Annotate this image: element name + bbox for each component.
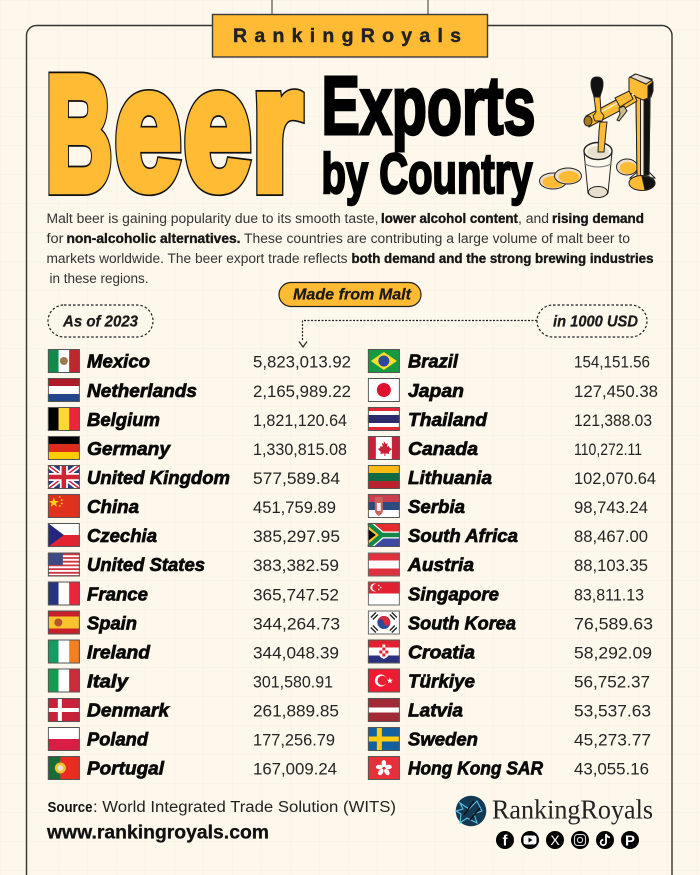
row: Japan: 127,450.38 [574,382,658,401]
row: South Korea [368,610,653,634]
banner: RankingRoyals [212,14,488,57]
row: Lithuania [368,465,656,489]
row: Mexico: 5,823,013.92 [253,353,351,372]
text block: intro paragraph: both demand and the strong brewing industries [352,251,654,266]
row: Denmark: Denmark [87,700,171,720]
row: Croatia [368,640,652,664]
row: Netherlands: 2,165,989.22 [253,382,351,401]
row: Latvia [368,698,651,722]
row: Portugal [48,756,337,780]
text block: intro paragraph: These countries are contributing a large volume of malt beer to [244,231,630,246]
pill: Made from Malt [279,282,421,306]
row: Lithuania: 102,070.64 [574,469,656,488]
row: China: China [87,496,139,517]
title: Beer: B [46,44,112,224]
row: Canada [368,436,642,460]
row: Germany: 1,330,815.08 [253,440,347,459]
row: United States: United States [87,554,205,575]
row: South Africa: 88,467.00 [574,527,648,546]
logo: RankingRoyals: RankingRoyals [492,794,653,824]
title: by Country: by Country [322,142,533,206]
icon: tiktok [596,831,614,849]
website: www.rankingroyals.com [46,822,269,844]
text block: intro paragraph: lower alcohol content [381,211,519,226]
row: Brazil: Brazil [408,351,459,372]
row: Serbia: Serbia [408,496,465,517]
row: Denmark [48,698,339,722]
row: United States: 383,382.59 [253,556,339,575]
right column: countries 16-30 [368,349,658,780]
row: Latvia: Latvia [408,700,463,720]
row: Portugal: 167,009.24 [253,760,337,779]
row: Austria: 88,103.35 [574,556,648,575]
icon: pinterest: P [625,832,635,850]
title: Beer: e [184,33,251,225]
row: France: 365,747.52 [253,585,339,604]
row: Austria: Austria [407,554,474,575]
left column: countries 1-15 [48,349,351,780]
row: Denmark: 261,889.85 [253,702,339,720]
row: United Kingdom [48,465,340,489]
row: Netherlands: Netherlands [87,380,197,401]
row: United Kingdom: United Kingdom [87,467,230,488]
row: Serbia: 98,743.24 [574,498,648,517]
row: Belgium [48,407,347,431]
row: Canada: 110,272.11 [574,440,642,459]
icon: pinterest [621,831,639,850]
text block: intro paragraph: non-alcoholic alternatives. [66,231,240,246]
row: Hong Kong SAR: 43,055.16 [574,760,649,779]
row: Singapore [368,582,644,606]
row: Hong Kong SAR: Hong Kong SAR [408,758,544,779]
row: Ireland: 344,048.39 [253,643,339,662]
row: Poland: 177,256.79 [253,731,335,750]
row: Sweden: Sweden [408,729,478,750]
title: Beer: B [46,44,112,224]
row: Netherlands [48,378,351,402]
hanging strings [272,0,428,14]
row: Italy [48,668,333,692]
row: United States [48,552,339,576]
row: Lithuania: Lithuania [408,467,492,488]
row: Japan: Japan [408,380,464,401]
row: Japan [368,378,658,402]
row: Belgium: 1,821,120.64 [253,411,347,430]
row: Türkiye: 56,752.37 [574,672,650,692]
row: France: France [87,583,148,604]
icon: X: X [550,832,560,848]
row: Ireland [48,640,339,664]
row: Sweden: 45,273.77 [574,731,651,750]
title: Beer: r [252,32,302,228]
row: South Africa [368,523,648,547]
row: Singapore: Singapore [408,583,499,604]
row: Spain: 344,264.73 [253,614,340,633]
tag: in 1000 USD [537,305,647,337]
row: Italy: 301,580.91 [253,672,333,692]
row: Spain [48,610,340,634]
icon: X [546,831,564,849]
title: Beer [46,32,302,228]
source line: : World Integrated Trade Solution (WITS) [93,799,396,816]
title: Beer: e [184,33,251,225]
icon: beer tap with glass and coasters [540,74,655,198]
row: Austria [368,552,648,576]
row: Croatia: 58,292.09 [574,643,652,662]
row: Thailand [368,407,652,431]
row: South Korea: South Korea [408,612,516,633]
banner: RankingRoyals: RankingRoyals [233,25,461,47]
row: Czechia [48,523,340,547]
row: Poland [48,727,335,751]
row: Mexico [48,349,351,373]
row: South Africa: South Africa [408,525,518,546]
row: Germany [48,436,347,460]
row: Thailand: Thailand [408,409,488,430]
row: United Kingdom: 577,589.84 [253,469,340,488]
row: France [48,582,339,606]
row: Czechia: 385,297.95 [253,527,340,546]
row: Singapore: 83,811.13 [574,585,644,604]
source line: Source [48,800,92,816]
tag: As of 2023: As of 2023 [62,314,138,330]
text block: intro paragraph: markets worldwide. The beer export trade reflects [46,251,348,266]
icon: facebook: f [502,832,508,850]
row: Canada: Canada [408,438,478,459]
row: Ireland: Ireland [87,641,151,662]
text block: intro paragraph: rising demand [552,211,644,226]
row: Italy: Italy [87,670,130,692]
row: China: 451,759.89 [253,498,336,517]
tag: in 1000 USD: in 1000 USD [553,314,638,330]
row: Sweden [368,727,651,751]
icon: facebook [496,831,514,850]
arrow: dashed connector [299,320,537,347]
row: Serbia [368,494,648,518]
icon: youtube [521,831,539,849]
row: Türkiye: Türkiye [408,670,475,692]
social icons [496,831,639,850]
row: Hong Kong SAR [368,756,649,780]
row: Brazil: 154,151.56 [574,353,650,372]
row: Portugal: Portugal [87,758,165,779]
row: Türkiye [368,668,650,692]
title: Beer: e [115,33,181,225]
title: Beer: e [115,33,181,225]
row: Thailand: 121,388.03 [574,411,652,430]
row: Brazil [368,349,650,373]
row: Latvia: 53,537.63 [574,702,651,720]
text block: intro paragraph: for [46,231,64,246]
row: Poland: Poland [87,729,149,750]
text block: intro paragraph: in these regions. [50,271,148,286]
pill: Made from Malt: Made from Malt [293,286,412,304]
title: Exports: Exports [322,59,536,152]
text block: intro paragraph: Malt beer is gaining popularity due to its smooth taste, [46,211,378,226]
row: China [48,494,336,518]
tag: As of 2023 [48,305,153,337]
title: Beer: r [252,32,302,228]
icon: instagram [571,831,589,849]
text block: intro paragraph: , and [518,211,549,226]
row: Spain: Spain [87,612,137,633]
text block: intro paragraph [46,211,654,286]
row: South Korea: 76,589.63 [574,614,653,633]
row: Belgium: Belgium [87,409,160,430]
row: Mexico: Mexico [87,351,150,372]
row: Germany: Germany [87,438,172,459]
row: Croatia: Croatia [408,641,475,662]
row: Czechia: Czechia [87,525,157,546]
